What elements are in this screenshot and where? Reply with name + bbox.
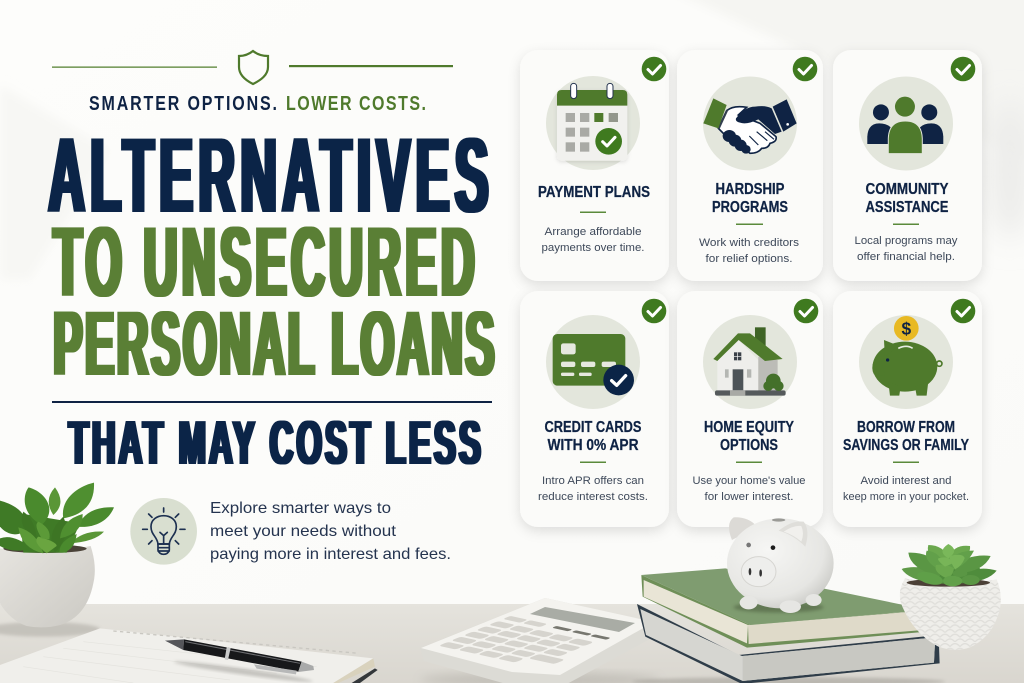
card text: payments over time. [542, 242, 644, 254]
card heading [712, 181, 788, 216]
card text [843, 475, 969, 503]
icon: handshake [703, 98, 797, 154]
calculator [420, 598, 660, 683]
panel: borrow from savings [833, 291, 982, 527]
title: ALTERNATIVES [48, 115, 488, 235]
icon: credit card [553, 334, 634, 395]
card heading: BORROW FROM [857, 419, 955, 436]
panel: payment plans [520, 50, 669, 281]
icon: shield [239, 51, 268, 84]
card heading: ASSISTANCE [866, 199, 948, 216]
card text [542, 226, 644, 254]
badge: check [951, 57, 975, 81]
icon: house [713, 327, 786, 396]
desk surface [0, 604, 1024, 683]
title [48, 115, 494, 395]
card text: offer financial help. [857, 251, 955, 263]
icon: people [867, 97, 943, 154]
card heading: WITH 0% APR [548, 437, 638, 454]
lower book [637, 604, 940, 683]
callout text: Explore smarter ways to [210, 500, 391, 517]
card heading: COMMUNITY [866, 181, 949, 198]
card text: for lower interest. [704, 491, 794, 503]
card heading: OPTIONS [720, 437, 778, 454]
card text: Local programs may [854, 235, 958, 247]
callout: lightbulb and text [130, 498, 451, 565]
card text [854, 235, 958, 263]
card heading [843, 419, 970, 454]
panel: community assistance [833, 50, 982, 281]
badge: check [793, 57, 817, 81]
card heading: SAVINGS OR FAMILY [843, 437, 970, 454]
badge: check [794, 299, 818, 323]
icon: calendar [557, 83, 627, 161]
card heading [866, 181, 949, 216]
potted plant [0, 483, 114, 637]
card text: keep more in your pocket. [843, 491, 969, 503]
card text [538, 475, 648, 503]
tagline: SMARTER OPTIONS. [89, 92, 277, 114]
card heading: CREDIT CARDS [544, 419, 642, 436]
notebook and pen [0, 628, 378, 683]
card heading: PAYMENT PLANS [538, 184, 650, 201]
title divider [52, 401, 492, 403]
panel: hardship programs [677, 50, 823, 281]
callout text: paying more in interest and fees. [210, 546, 451, 563]
icon: lightbulb [130, 498, 197, 565]
card heading [704, 419, 795, 454]
card heading [544, 419, 642, 454]
badge: check [642, 57, 666, 81]
tagline: LOWER COSTS. [286, 92, 426, 114]
badge: check [951, 299, 975, 323]
pen [165, 639, 314, 683]
card text [692, 475, 806, 503]
upper book [641, 568, 929, 648]
header ornament with shield [52, 51, 453, 84]
card heading: HOME EQUITY [704, 419, 795, 436]
card text: Avoid interest and [860, 475, 952, 487]
stacked books [632, 568, 945, 683]
white piggy bank [727, 517, 834, 613]
succulent in textured pot [900, 544, 1001, 650]
title: TO UNSECURED [54, 208, 475, 318]
badge: check [642, 299, 666, 323]
card text: Intro APR offers can [542, 475, 644, 487]
card heading: PROGRAMS [712, 199, 788, 216]
card heading: HARDSHIP [716, 181, 784, 198]
tagline [89, 92, 426, 114]
card text: Use your home's value [692, 475, 806, 487]
card text: Arrange affordable [544, 226, 642, 238]
title: PERSONAL LOANS [54, 293, 494, 395]
callout text: meet your needs without [210, 523, 397, 540]
card text: reduce interest costs. [538, 491, 648, 503]
icon: green piggy bank with coin [872, 316, 942, 396]
card text [699, 237, 800, 265]
card text: for relief options. [706, 253, 792, 265]
panel: credit cards [520, 291, 669, 527]
icon: green piggy bank with coin: $ [901, 319, 911, 339]
subtitle: THAT MAY COST LESS [69, 408, 481, 478]
callout text [210, 500, 451, 563]
panel: home equity [677, 291, 823, 527]
card text: Work with creditors [699, 237, 800, 249]
